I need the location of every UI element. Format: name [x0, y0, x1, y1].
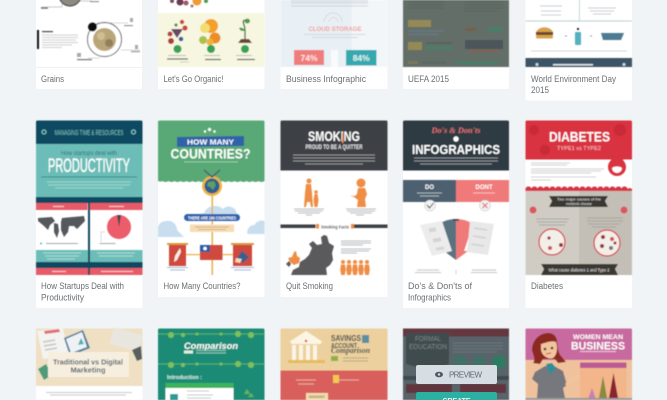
- heading: countries: COUNTRIES?: [170, 146, 250, 162]
- caption: UEFA 2015: [408, 74, 449, 85]
- card: UEFA 2015: [403, 0, 509, 89]
- heading: CLOUD STORAGE: [308, 26, 362, 33]
- card: How Startups Deal with Productivity: [36, 120, 142, 308]
- caption: Grains: [41, 74, 64, 85]
- thumbnail: diabetes: [526, 120, 632, 275]
- heading: infographics: INFOGRAPHICS: [412, 143, 500, 157]
- thumbnail: organic produce: [158, 0, 264, 67]
- flag left: [167, 243, 188, 266]
- card: Do's & Don'ts of Infographics: [403, 120, 509, 308]
- caption: World Environment Day: [531, 74, 616, 85]
- stat: 84%: 84%: [353, 53, 370, 63]
- icon: bottle: [575, 32, 581, 45]
- card: Traditional vs Digital Marketing: Marketing: [70, 366, 106, 374]
- caption: Business Infographic: [286, 74, 366, 85]
- thumbnail: diabetes: TYPE1 vs TYPE2: [557, 146, 601, 152]
- card: Women Mean Business: BUSINESS: [571, 340, 625, 352]
- heading: SAVINGS: [331, 334, 362, 343]
- card: Formal Education with hover overlay: [403, 328, 509, 400]
- DO panel: DO: [425, 185, 434, 191]
- heading: WOMEN MEAN: [573, 334, 623, 341]
- icon row: people: [340, 260, 370, 275]
- heading: productivity: PRODUCTIVITY: [48, 156, 130, 177]
- heading: Comparison: [331, 346, 371, 355]
- icon: sprout: [238, 19, 252, 43]
- pie chart: [107, 215, 131, 239]
- thumbnail: do's and don'ts: [403, 120, 509, 274]
- heading: [331, 334, 371, 355]
- flag right: [231, 243, 254, 266]
- card: Grains: [36, 0, 142, 89]
- heading: Traditional vs Digital: [53, 358, 123, 366]
- card: Formal Education with hover overlay: EDUCATION: [409, 342, 447, 351]
- clouds: [158, 206, 264, 237]
- caption: How Startups Deal with: [41, 281, 124, 292]
- map of Europe: [291, 235, 334, 275]
- arrows diagram: [420, 219, 494, 260]
- icon: eye: [435, 372, 443, 377]
- card: Comparison: [158, 328, 264, 400]
- thumbnail: smoking: PROUD TO BE A QUITTER: [306, 145, 363, 151]
- heading: diabetes: DIABETES: [549, 130, 610, 144]
- DONT panel: DONT: [476, 185, 493, 191]
- card: Let's Go Organic!: [158, 0, 264, 89]
- card: Savings Account Comparison: MANAGEMENT: [309, 395, 326, 399]
- icon: check: [424, 200, 436, 211]
- thumbnail: productivity: MANAGING TIME & RESOURCES: [54, 130, 124, 137]
- card: Diabetes: [526, 120, 632, 308]
- icon: bathtub: [601, 33, 624, 40]
- icon: burger: [536, 27, 553, 38]
- thumbnail: productivity: [36, 120, 142, 275]
- thumbnail: do's and don'ts: Do's & Don'ts: [431, 125, 481, 135]
- card: Women Mean Business: [526, 328, 632, 400]
- caption: How Many Countries?: [164, 281, 240, 292]
- thumbnail: countries: [158, 120, 264, 275]
- card: World Environment Day 2015: 2015: [531, 85, 549, 96]
- card: Traditional vs Digital Marketing: [36, 327, 143, 400]
- banner bottom: [541, 264, 618, 275]
- thumbnail: grains: [37, 0, 140, 60]
- caption: Diabetes: [531, 281, 563, 292]
- heading: FORMAL: [415, 334, 441, 343]
- heading: smoking: SMOKING: [308, 129, 360, 144]
- world map: [38, 216, 85, 238]
- card: How Startups Deal with Productivity: Productivity: [41, 292, 84, 304]
- icon: cells left: [539, 229, 565, 255]
- caption: Let's Go Organic!: [164, 74, 224, 85]
- DO panel: [403, 180, 456, 202]
- caption: Do's & Don'ts of: [408, 281, 472, 292]
- button: preview: PREVIEW: [449, 370, 482, 380]
- icon: berries: [168, 20, 188, 44]
- thumbnail: countries: HOW MANY: [187, 138, 234, 146]
- card: World Environment Day 2015: [526, 0, 632, 100]
- banner top: metabolic disease: [566, 201, 592, 206]
- icon: woman smoking: [350, 178, 367, 207]
- label pill: [184, 214, 240, 221]
- card: How Many Countries?: [158, 120, 264, 297]
- thumbnail: UEFA dimmed: [403, 0, 509, 67]
- stat: 74%: 74%: [300, 53, 318, 63]
- thumbnail: environment day: [526, 0, 632, 67]
- icon: citrus: [199, 19, 220, 46]
- card: Business Infographic: [280, 0, 388, 89]
- banner top: Two major causes of the: [557, 196, 601, 202]
- banner: [177, 136, 244, 147]
- card: Do's & Don'ts of Infographics: Infographics: [408, 292, 451, 304]
- icon: mother and child: [304, 178, 318, 207]
- heading: ACCOUNT: [331, 343, 358, 350]
- card: Savings Account Comparison: [280, 328, 388, 400]
- thumbnail: smoking: Smoking Facts: [321, 224, 349, 230]
- illustration: businesswoman: [532, 333, 581, 398]
- banner top: [549, 196, 608, 207]
- heading: Comparison: [184, 341, 238, 352]
- banner bottom: What cause diabetes 1 and Type 2: [548, 268, 610, 274]
- label pill: THERE ARE 196 COUNTRIES: [188, 215, 236, 220]
- icon: cross: [480, 200, 490, 211]
- card: Quit Smoking: [280, 120, 388, 297]
- thumbnail: smoking: [280, 120, 388, 275]
- icon: drop: [608, 153, 626, 176]
- icon: cells right: [594, 230, 620, 256]
- thumbnail: cloud storage: [280, 0, 388, 67]
- flag center: [200, 245, 222, 260]
- globe: [202, 170, 222, 196]
- illustration: newspaper: [37, 328, 69, 359]
- DONT panel: [456, 180, 509, 202]
- icon: bank: [288, 331, 325, 363]
- chart panel: [580, 362, 626, 400]
- illustration: tablet: [64, 330, 90, 356]
- card: Comparison: Introduction :: [167, 375, 202, 381]
- caption: Quit Smoking: [286, 281, 333, 292]
- thumbnail: productivity: How startups deal with: [61, 150, 117, 157]
